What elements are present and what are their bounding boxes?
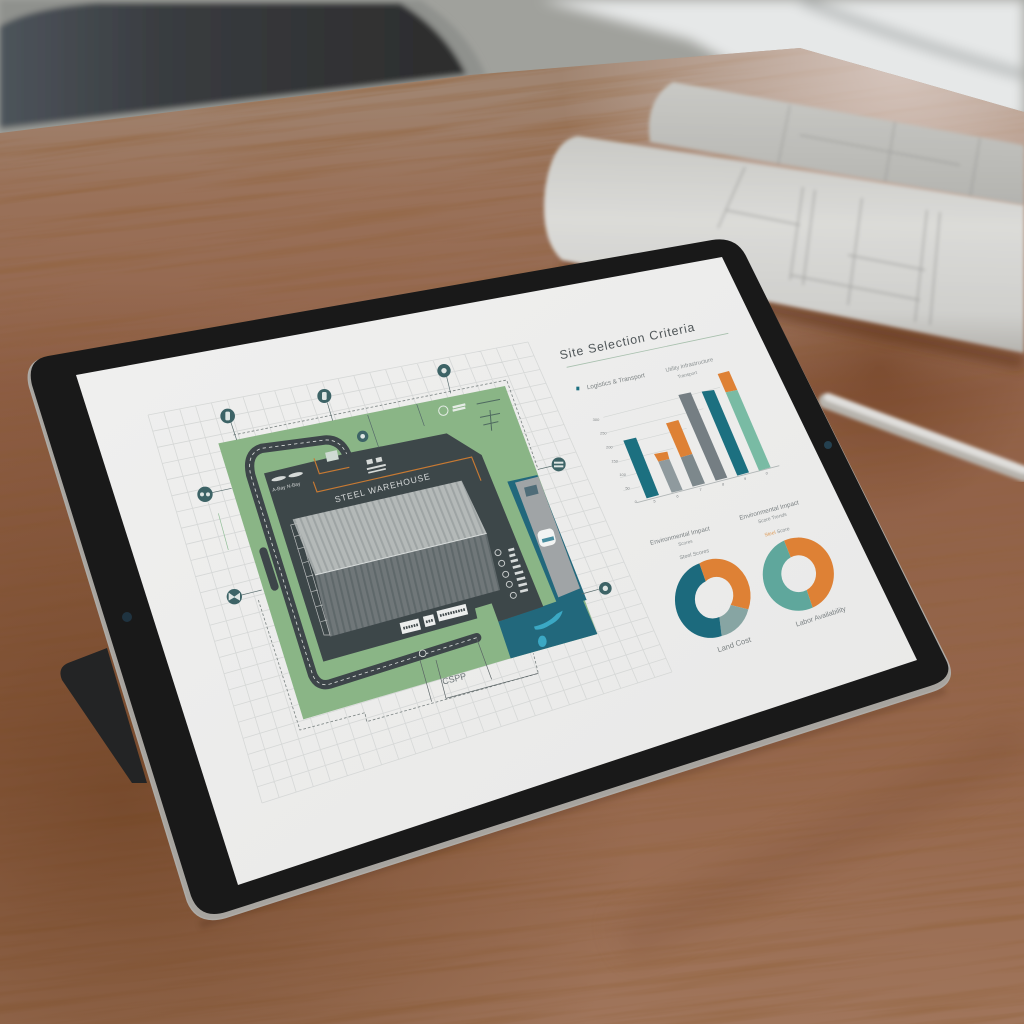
parking icons	[495, 550, 516, 598]
teal utility strip	[507, 475, 587, 607]
rolled blueprints	[544, 82, 1024, 362]
donut 2 subheading: Score Trends	[757, 512, 788, 525]
icon: gate badge	[537, 528, 557, 548]
axis tick labels: 250	[600, 431, 607, 436]
chart axis	[637, 466, 779, 503]
icon: parked vehicles	[271, 471, 303, 482]
icon: entrance block	[325, 450, 339, 462]
dock signs	[400, 604, 468, 634]
axis tick labels: 5	[653, 499, 656, 504]
camera side	[824, 441, 832, 449]
teal water area	[498, 593, 597, 658]
bar 1	[623, 438, 659, 498]
dimension lines	[420, 638, 538, 702]
icon: water shape	[534, 611, 563, 647]
donut 1 heading: Environmental Impact	[649, 525, 711, 547]
callout icon 2	[317, 389, 331, 403]
faint green guide line	[218, 513, 228, 550]
callout glyphs	[200, 368, 608, 601]
donut 1 subheading: Scores	[678, 538, 694, 547]
side slot	[263, 551, 275, 587]
axis tick labels: 6	[676, 493, 679, 498]
top utility icons	[439, 404, 465, 415]
axis tick labels: 100	[619, 472, 627, 477]
donut chart 2	[763, 538, 834, 611]
grid lines	[603, 387, 720, 491]
chart subheading: Transport	[677, 370, 698, 379]
background wall	[0, 0, 1024, 140]
callout icon 1	[220, 409, 235, 423]
parking stalls	[508, 548, 528, 593]
warehouse ridge line	[315, 533, 487, 575]
site boundary dashed line	[233, 380, 538, 730]
roll shadow	[565, 266, 1024, 362]
chart panel	[558, 320, 847, 654]
dark paved lot	[264, 433, 543, 662]
callout icon 6	[552, 457, 566, 471]
axis tick labels: 200	[606, 445, 613, 450]
green site area	[218, 386, 597, 719]
orange route upper	[313, 457, 481, 492]
callout icon 4	[197, 487, 213, 502]
bar 6	[718, 371, 771, 471]
donut chart 1	[675, 559, 751, 638]
tablet shadow	[200, 690, 945, 925]
legend label: Logistics & Transport	[586, 372, 646, 391]
site plan	[197, 364, 612, 730]
bar 3	[666, 420, 705, 487]
front blueprint roll	[544, 136, 1024, 353]
donut 2 caption: Steel Score	[764, 526, 791, 539]
callout icon 8	[357, 431, 368, 442]
road junction marker	[419, 650, 426, 657]
tablet stand	[60, 648, 147, 783]
vehicle label: A-Bay N-Bay	[272, 481, 302, 494]
connector lines	[212, 377, 599, 595]
grey utility yard	[515, 477, 580, 597]
dock sign marks	[403, 609, 465, 628]
axis tick labels: 300	[593, 417, 600, 422]
camera front	[122, 612, 132, 622]
icon: utility panel	[524, 485, 539, 497]
warehouse roof	[293, 481, 487, 575]
axis tick labels: 0	[766, 470, 769, 475]
axis tick labels: 8	[722, 481, 725, 486]
chart heading: Utility Infrastructure	[665, 357, 714, 374]
axis tick labels: 150	[611, 459, 619, 464]
title underline	[567, 333, 728, 367]
bar 2	[654, 452, 683, 493]
perimeter road	[250, 440, 477, 685]
icon: power pylon	[477, 399, 500, 431]
icon: dock marker	[366, 457, 386, 474]
axis tick labels: 0	[635, 499, 638, 504]
donut 2 heading: Environmental Impact	[739, 499, 800, 522]
panel title: Site Selection Criteria	[558, 320, 696, 362]
callout icon 5	[227, 589, 242, 604]
donut 1 label: Land Cost	[716, 635, 753, 654]
donut 2 label: Labor Availability	[795, 606, 847, 629]
warehouse label: STEEL WAREHOUSE	[334, 471, 432, 505]
legend marker	[576, 387, 579, 390]
callout icon 3	[437, 364, 451, 377]
orange route small	[314, 458, 349, 474]
axis tick labels: 9	[744, 476, 747, 481]
tablet screen	[76, 257, 917, 885]
stylus pen	[826, 397, 1024, 474]
callout icon 7	[599, 582, 612, 595]
grid background	[148, 342, 672, 803]
axis tick labels	[593, 417, 769, 504]
warehouse wall	[315, 533, 500, 637]
dimension label: CSPP	[441, 671, 467, 687]
bar 5	[702, 390, 749, 476]
bar 4	[678, 392, 727, 481]
tablet body	[31, 239, 948, 914]
axis tick labels: 7	[699, 487, 702, 492]
tablet edge	[28, 241, 950, 920]
back blueprint roll	[649, 82, 1024, 205]
office chair	[0, 0, 486, 132]
donut 1 caption: Steel Scores	[679, 548, 710, 561]
axis tick labels: 50	[625, 485, 631, 490]
loading bays	[291, 523, 330, 635]
